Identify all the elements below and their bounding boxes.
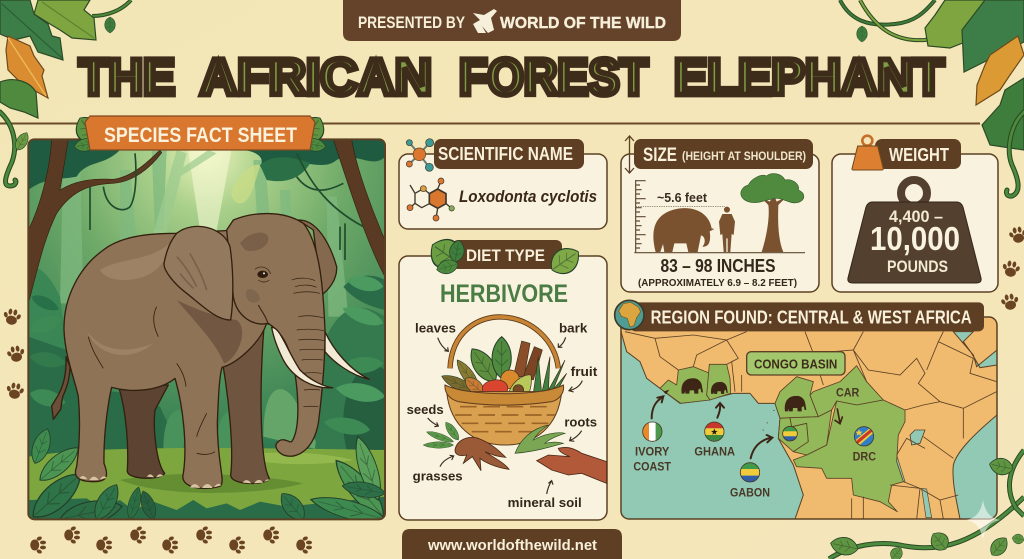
heading pill (452, 240, 562, 269)
icon: molecule (406, 139, 434, 171)
weight unit: POUNDS (887, 257, 948, 276)
banner: species fact sheet (70, 111, 330, 153)
decorative sparkle (966, 500, 1000, 540)
human silhouette (719, 207, 735, 252)
country labels: GHANA (694, 445, 735, 459)
food labels: leaves (415, 321, 456, 336)
body (64, 230, 267, 488)
website footer (402, 529, 622, 559)
weight high value: 10,000 (870, 220, 960, 257)
weight low value: 4,400 – (889, 207, 943, 226)
icon: africa globe (615, 300, 644, 330)
elephant (52, 214, 369, 488)
banner leaves (70, 111, 330, 153)
corner foliage: bottom right vine (829, 450, 1024, 559)
tail (52, 357, 70, 419)
panel: diet type (399, 233, 607, 520)
heading pill (634, 139, 813, 169)
undergrowth (28, 268, 387, 457)
country labels: CAR (836, 385, 860, 399)
paw prints: left trail (1, 307, 27, 400)
header badge (343, 0, 681, 41)
corner foliage: top right (840, 0, 1024, 196)
forest background (25, 139, 391, 530)
callout: congo basin (747, 352, 845, 375)
corner foliage: top left (0, 0, 131, 186)
banner text: SPECIES FACT SHEET (104, 124, 297, 147)
food labels: grasses (413, 469, 463, 484)
foreground leaves (25, 426, 391, 530)
callout: congo basin: CONGO BASIN (754, 356, 837, 371)
height label: ~5.6 feet (657, 191, 708, 205)
heading pill: DIET TYPE (466, 246, 545, 265)
seeds and grass (423, 420, 565, 453)
highlighted countries (660, 364, 905, 512)
heading pill (630, 302, 984, 331)
weight graphic (848, 180, 981, 283)
ruler (634, 180, 805, 253)
label arrows (428, 337, 582, 494)
paw prints: right trail (999, 225, 1024, 311)
roots (455, 437, 509, 471)
country labels: DRC (853, 450, 876, 464)
country labels: GABON (730, 485, 770, 499)
basket body (447, 392, 562, 445)
icon: pill leaves (424, 233, 585, 280)
tree trunks (28, 139, 162, 303)
near ear (164, 226, 233, 320)
hand with soil (537, 447, 607, 483)
presented by label: PRESENTED BY (358, 13, 466, 32)
map arrows (652, 396, 842, 458)
panel: size (621, 136, 819, 292)
icon: orange weight (852, 136, 883, 170)
far tusk (325, 332, 369, 379)
illustration: food basket (423, 317, 607, 483)
heading pill (434, 139, 584, 169)
heading pill: WEIGHT (889, 145, 949, 165)
icon: chemical structure (407, 178, 454, 221)
tree (762, 193, 787, 252)
country labels (633, 385, 876, 499)
flag: ghana (704, 422, 724, 442)
flag: ivory coast (642, 422, 662, 442)
flag: gabon on map (783, 426, 797, 441)
mouth (258, 305, 268, 325)
chart: height comparison (634, 174, 805, 253)
panel: scientific name (399, 139, 607, 229)
head and trunk (227, 214, 325, 456)
ground (29, 448, 384, 510)
heading pill: (HEIGHT AT SHOULDER) (682, 151, 806, 163)
map ocean (621, 332, 803, 519)
height conversion: (APPROXIMATELY 6.9 – 8.2 FEET) (638, 277, 797, 289)
toes (79, 474, 269, 488)
heading pill: SIZE (643, 145, 677, 166)
heading pill (875, 139, 961, 169)
title: ELEPHANT (674, 48, 944, 106)
website footer: www.worldofthewild.net (427, 537, 597, 554)
header divider (0, 122, 980, 124)
food labels: roots (564, 415, 597, 430)
basket contents (439, 337, 567, 398)
title: THE (79, 48, 175, 106)
near tusk (272, 327, 333, 388)
elephant silhouette (653, 208, 714, 252)
food labels: seeds (407, 402, 444, 417)
title (79, 48, 944, 106)
panel: region map (615, 300, 997, 519)
country borders (625, 332, 997, 519)
country labels: COAST (633, 459, 672, 473)
panel: weight (832, 136, 998, 292)
diet heading: HERBIVORE (440, 280, 568, 308)
title: FOREST (459, 48, 648, 106)
icon: height arrow (625, 136, 634, 173)
heading pill: SCIENTIFIC NAME (438, 144, 573, 164)
food labels (407, 321, 598, 510)
title: AFRICAN (200, 48, 432, 106)
species name: Loxodonta cyclotis (459, 187, 597, 206)
height value: 83 – 98 INCHES (660, 256, 776, 276)
photo frame (28, 139, 385, 519)
flag: drc (854, 426, 874, 446)
flag: gabon (740, 462, 760, 482)
brand name: WORLD OF THE WILD (500, 15, 666, 32)
icon: wolf logo (473, 9, 497, 33)
far ear (298, 220, 337, 295)
far legs (119, 385, 168, 478)
paw prints: bottom trail (30, 526, 312, 554)
map land (621, 317, 997, 519)
food labels: mineral soil (508, 495, 582, 510)
panel: elephant illustration (25, 139, 391, 530)
country labels: IVORY (635, 445, 669, 459)
food labels: fruit (571, 364, 598, 379)
eye (258, 271, 268, 278)
congo outflow islands (763, 410, 774, 431)
food labels: bark (559, 321, 588, 336)
elephant markers (681, 378, 806, 411)
